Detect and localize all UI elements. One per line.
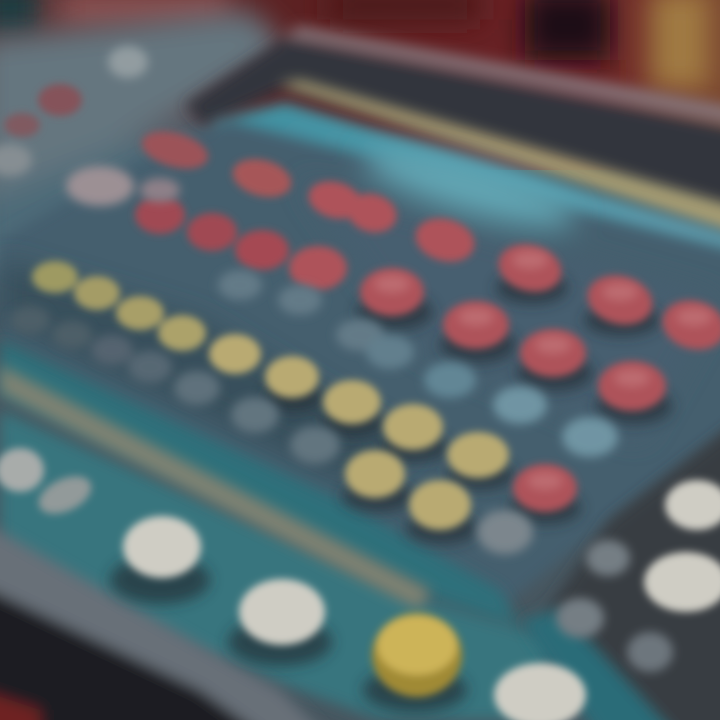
grey markers xyxy=(10,270,673,672)
marker and chip shadows xyxy=(110,272,672,712)
red markers xyxy=(4,84,720,512)
background: table and objects at top xyxy=(0,0,720,170)
left grey board edge xyxy=(0,10,290,300)
right lower panel xyxy=(520,420,720,720)
tan rail xyxy=(0,365,430,610)
red marker highlights xyxy=(374,251,712,490)
large yellow chip xyxy=(372,613,462,697)
yellow strip of tray xyxy=(278,80,720,236)
pale markers xyxy=(0,46,180,206)
yellow markers xyxy=(32,261,509,530)
tray frame xyxy=(185,26,720,215)
white chips xyxy=(0,448,720,720)
surface shading xyxy=(0,135,720,480)
teal lower band xyxy=(0,340,560,720)
bottom left dark edge xyxy=(0,520,330,720)
teal playing surface xyxy=(0,102,720,610)
